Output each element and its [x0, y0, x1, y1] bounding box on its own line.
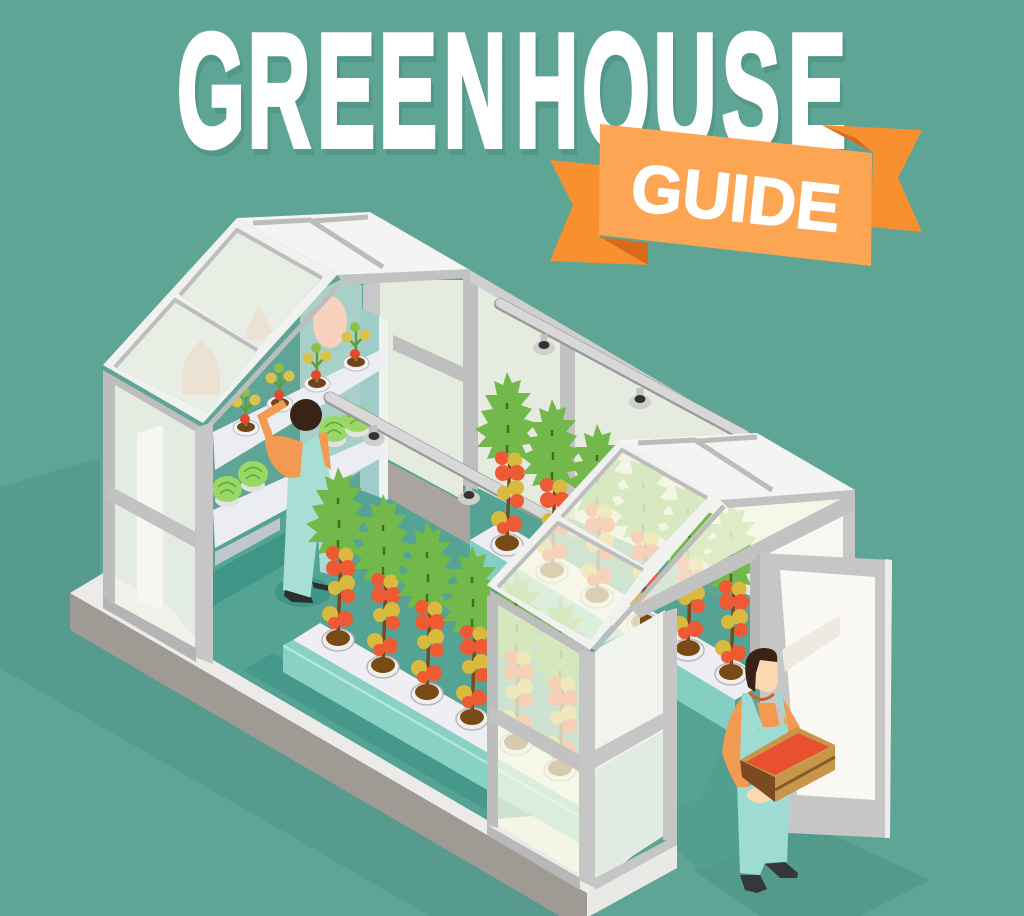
ribbon: GUIDE: GUIDE — [627, 150, 844, 247]
roof frame — [103, 218, 337, 423]
boots — [740, 875, 767, 893]
right wall panel — [773, 495, 855, 570]
left wall glass — [498, 600, 580, 875]
front greenhouse — [487, 433, 855, 890]
worker tending plants — [262, 399, 332, 607]
crate — [740, 760, 775, 802]
ribbon: GUIDE — [550, 124, 922, 266]
collar — [749, 692, 774, 700]
hair — [745, 648, 777, 692]
top roof panel — [237, 212, 470, 275]
top roof panel — [620, 433, 855, 500]
base platform — [70, 450, 770, 916]
back row tomato plants — [475, 372, 761, 685]
gable end glass — [595, 610, 665, 880]
door shadow on ground — [693, 815, 930, 916]
legs — [737, 783, 790, 875]
side glass — [103, 375, 200, 655]
back row hydroponic trough — [470, 522, 770, 735]
arms and chest — [722, 695, 753, 787]
trough shadow on floor — [243, 653, 490, 812]
inner white column — [137, 425, 163, 610]
hanging lamps behind roof glass — [182, 304, 273, 395]
interior floor — [130, 450, 770, 820]
back greenhouse front frame — [103, 212, 470, 664]
roof frame — [487, 440, 720, 650]
face — [755, 660, 778, 692]
back wall panels — [363, 270, 850, 600]
roof glass — [115, 300, 257, 413]
ground shadow — [0, 458, 600, 916]
front row tomato plants — [306, 467, 590, 781]
shelves with seedlings — [212, 280, 388, 566]
title: GREENHOUSE: GREENHOUSE — [177, 2, 846, 181]
hand — [747, 787, 773, 803]
title: GREENHOUSE: GREENHOUSE — [180, 8, 849, 187]
open door — [750, 553, 892, 838]
posts and rails — [487, 595, 498, 828]
front row hydroponic trough — [283, 623, 610, 855]
hanging lamp: peach — [313, 296, 347, 348]
roof rake beam — [630, 495, 855, 618]
overalls bib — [740, 692, 789, 762]
roof glass — [498, 523, 643, 640]
shelf shadow on floor — [213, 530, 290, 606]
upper pipe with lamps — [500, 303, 745, 436]
wall posts — [103, 372, 115, 603]
lower pipe with lamps — [330, 397, 575, 532]
farmer with tomato crate — [722, 648, 835, 893]
